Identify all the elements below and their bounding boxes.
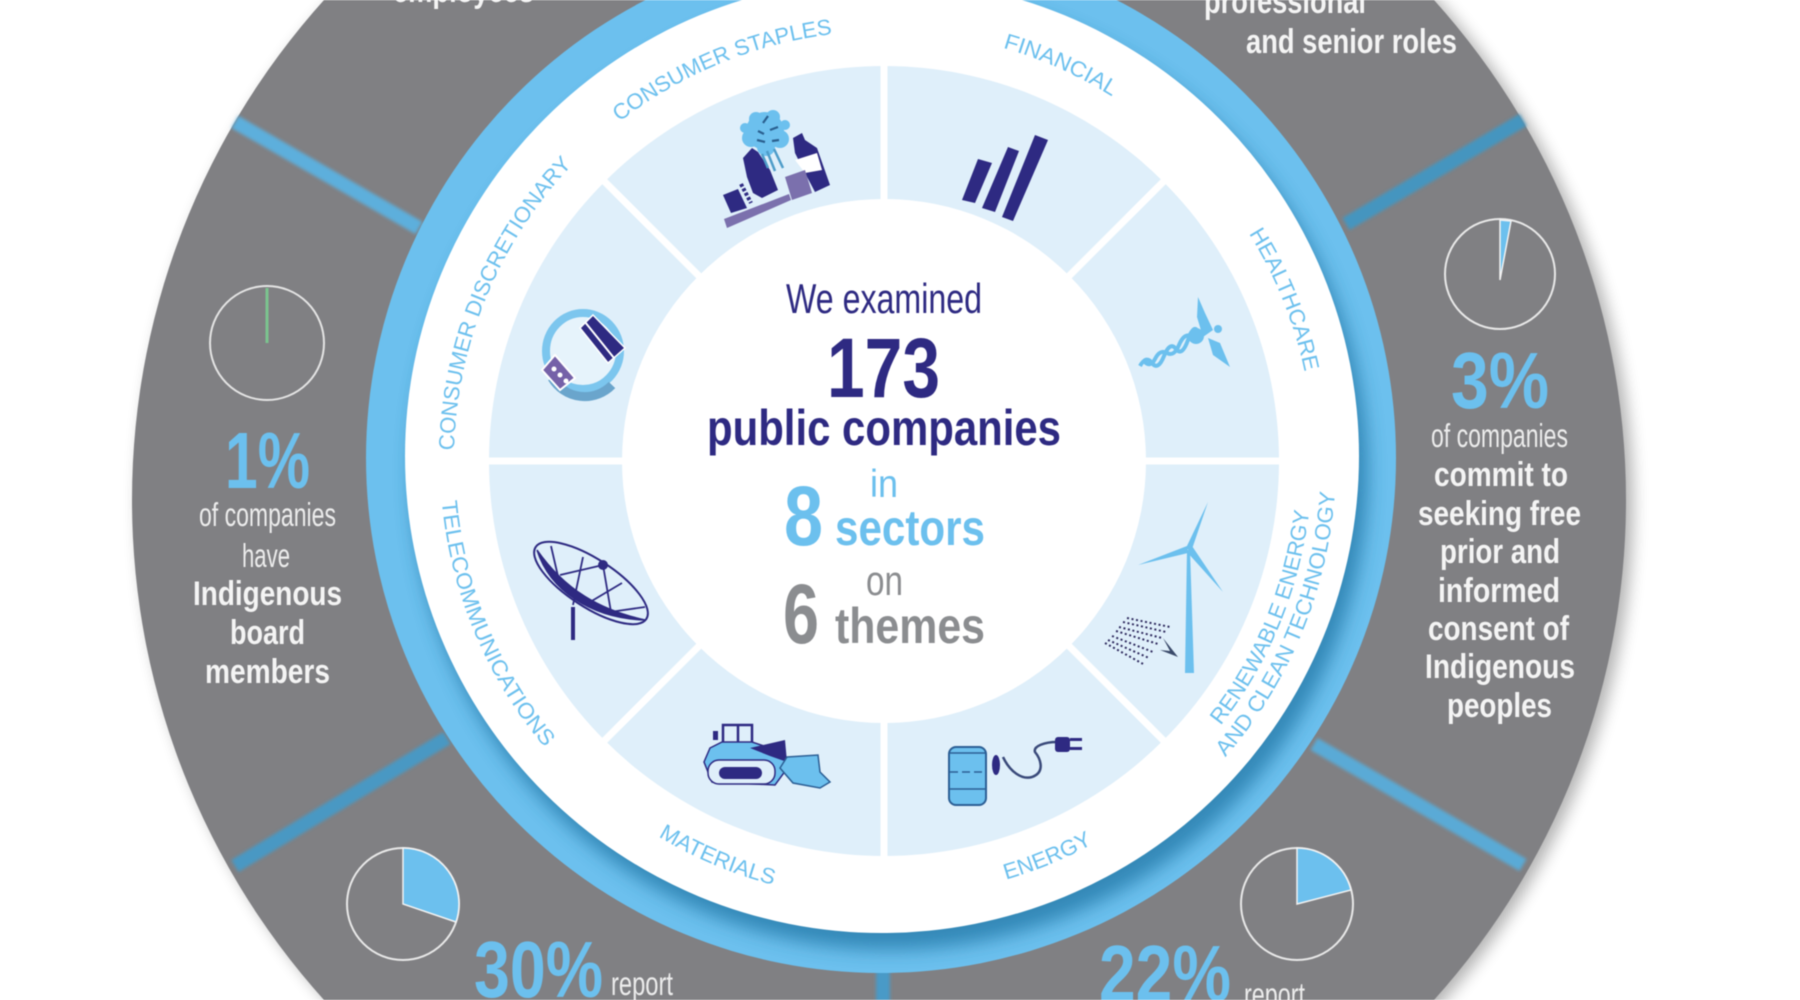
panel: free prior and informed consent stat: commit to xyxy=(1434,456,1568,494)
blue ring xyxy=(366,0,1396,973)
center text: 8 xyxy=(784,469,823,563)
panel: 22% stat xyxy=(1099,848,1353,1000)
panel: free prior and informed consent stat: of companies xyxy=(1431,417,1568,454)
pie: 3% xyxy=(1445,219,1555,329)
panel: free prior and informed consent stat: prior and xyxy=(1440,533,1560,571)
panel: board members stat xyxy=(193,286,342,691)
center text: 173 xyxy=(827,321,940,415)
panel: free prior and informed consent stat: consent of xyxy=(1428,610,1570,648)
panel: board members stat: of companies xyxy=(199,496,336,533)
top right cropped text xyxy=(1204,0,1457,61)
panel: free prior and informed consent stat xyxy=(1418,219,1581,725)
ring dividers xyxy=(235,120,1523,1000)
sector labels: ENERGY xyxy=(1002,830,1088,880)
panel: 30% stat xyxy=(347,848,673,1000)
panel: free prior and informed consent stat: seeking free xyxy=(1418,495,1581,533)
panel: board members stat: members xyxy=(205,653,330,691)
sector labels: CONSUMER STAPLES xyxy=(613,18,832,120)
icon: satellite dish xyxy=(523,527,659,640)
sector labels: AND CLEAN TECHNOLOGY xyxy=(1217,491,1336,758)
icon: financial bars xyxy=(962,135,1048,221)
sector labels: HEALTHCARE xyxy=(1249,226,1320,372)
icon: consumer staples xyxy=(723,110,830,228)
sector labels: CONSUMER DISCRETIONARY xyxy=(438,154,568,450)
panel: board members stat: have xyxy=(242,537,290,574)
center text: in xyxy=(870,463,898,506)
icon: bulldozer xyxy=(704,725,830,788)
top right cropped text: and senior roles xyxy=(1246,23,1457,61)
center text xyxy=(707,275,1061,661)
panel: free prior and informed consent stat: 3% xyxy=(1451,336,1549,425)
pie: 22% xyxy=(1241,848,1353,960)
icon: smartwatch xyxy=(542,313,625,397)
center text: 6 xyxy=(783,567,819,661)
panel: board members stat: 1% xyxy=(225,416,310,505)
panel: free prior and informed consent stat: peoples xyxy=(1447,687,1552,725)
panel: free prior and informed consent stat: Indigenous xyxy=(1425,648,1575,686)
icon: wind turbine and solar panel xyxy=(1105,502,1223,673)
center text: public companies xyxy=(707,400,1061,456)
sector labels: RENEWABLE ENERGY xyxy=(1209,509,1309,725)
sector labels: FINANCIAL xyxy=(1004,33,1113,96)
panel: free prior and informed consent stat: informed xyxy=(1438,572,1560,610)
panel: board members stat: Indigenous xyxy=(193,575,342,613)
icon: caduceus xyxy=(1140,297,1230,367)
panel: sector wedges xyxy=(483,60,1285,862)
sector labels xyxy=(438,18,1336,884)
center text: sectors xyxy=(835,500,985,556)
pie: 1% xyxy=(210,286,324,400)
center text: on xyxy=(866,557,903,604)
sector labels: MATERIALS xyxy=(659,824,776,884)
center text: themes xyxy=(835,598,985,654)
icon: barrel and plug xyxy=(949,737,1082,805)
center text: We examined xyxy=(786,275,982,322)
panel: board members stat: board xyxy=(230,614,305,652)
white sector disc xyxy=(405,0,1359,933)
sector labels: TELECOMMUNICATIONS xyxy=(442,500,555,746)
pie: 30% xyxy=(347,848,459,960)
